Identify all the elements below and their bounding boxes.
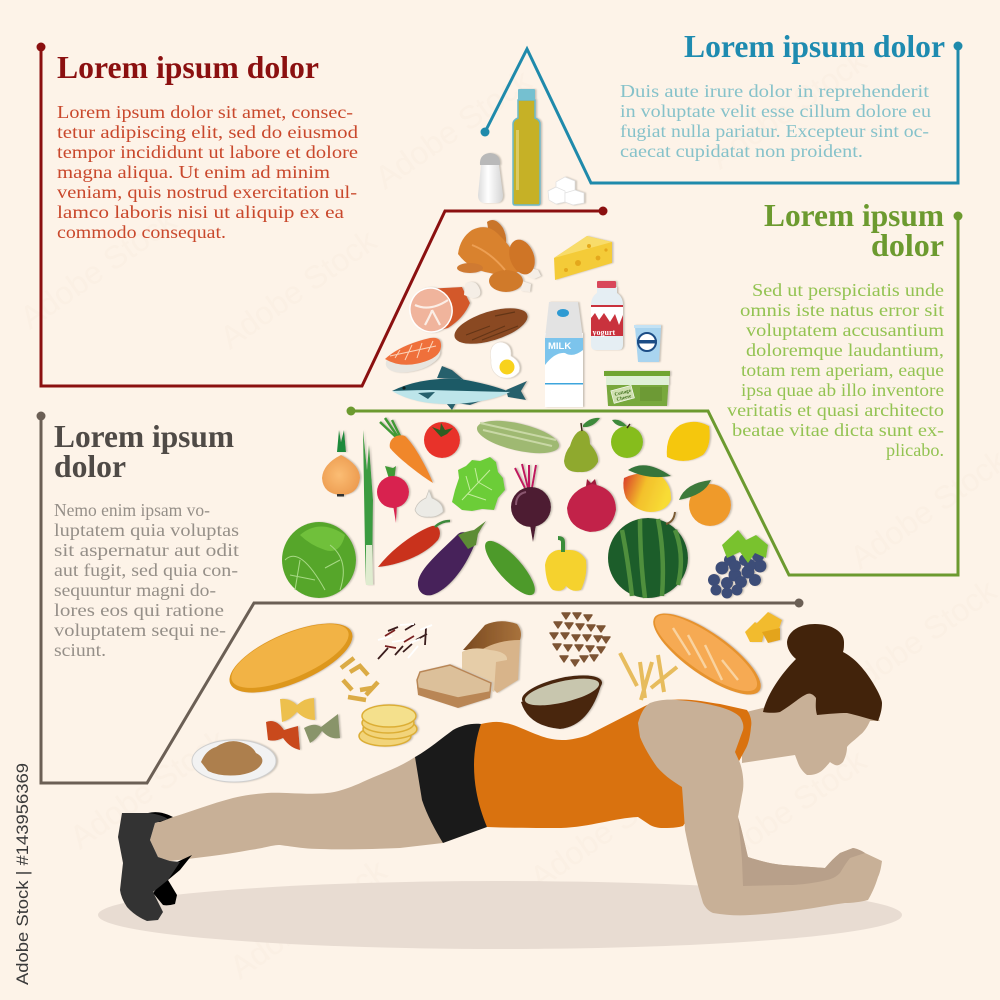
- figure: woman in plank pose: [118, 624, 882, 921]
- body text: green: doloremque laudantium,: [746, 340, 944, 360]
- body text: gray: [54, 500, 239, 660]
- stock credit: Adobe Stock | #143956369: [14, 763, 32, 985]
- icon: onion: [322, 430, 360, 496]
- text: Adobe Stock: [523, 762, 693, 896]
- icon: green onion: [363, 430, 373, 585]
- body text: blue: caecat cupidatat non proident.: [620, 141, 863, 161]
- heading: gray: [54, 418, 234, 484]
- icon: green apple: [611, 420, 643, 458]
- icon: bread slices: [417, 665, 491, 708]
- body text: green: beatae vitae dicta sunt ex-: [732, 420, 944, 440]
- frame: fruit and vegetable tier green line: [346, 212, 962, 575]
- icon: buckwheat: [550, 613, 610, 666]
- icon: cabbage: [282, 522, 356, 598]
- icon: garlic: [415, 490, 443, 517]
- icon: beet: [511, 464, 551, 542]
- neck and face: [742, 685, 880, 775]
- icon: eggplant: [418, 521, 486, 595]
- icon: yogurt bottle: [591, 281, 623, 350]
- icon: fried egg: [490, 342, 520, 378]
- body text: red: magna aliqua. Ut enim ad minim: [57, 162, 330, 182]
- icon: zucchini: [474, 414, 562, 460]
- body text: green: totam rem aperiam, eaque: [741, 360, 944, 380]
- body text: blue: Duis aute irure dolor in reprehenderit: [620, 81, 929, 101]
- icon: tomato: [424, 422, 460, 458]
- ground shadow: [98, 881, 902, 949]
- icon: fish: [392, 366, 527, 410]
- body text: green: omnis iste natus error sit: [740, 300, 944, 320]
- icon: salt shaker: [478, 153, 503, 203]
- frame: protein tier red line: [36, 42, 608, 386]
- text panel: red: [57, 49, 358, 242]
- icon: cucumber: [478, 534, 542, 602]
- text: Adobe Stock: [368, 62, 538, 196]
- body text: green: Sed ut perspiciatis unde: [752, 280, 944, 300]
- icon: cottage cheese tub: Cottage: [614, 389, 632, 398]
- body text: red: Lorem ipsum dolor sit amet, consec-: [57, 102, 353, 122]
- icon: salmon steak: [383, 338, 443, 378]
- leg: [150, 757, 450, 861]
- icon: milk carton: MILK: [548, 341, 571, 352]
- body text: gray: sequuntur magni do-: [54, 580, 216, 600]
- shoe: [118, 812, 192, 921]
- icon: pear: [564, 418, 600, 472]
- body text: red: veniam, quis nostrud exercitation ul-: [57, 182, 357, 202]
- icon: cottage cheese tub: [604, 371, 670, 406]
- body text: gray: lores eos qui ratione: [54, 600, 224, 620]
- icon: orange: [679, 480, 731, 526]
- body text: red: lamco laboris nisi ut aliquip ex ea: [57, 202, 344, 222]
- icon: pomegranate: [567, 479, 616, 532]
- icon: plate with food: [192, 740, 276, 782]
- shorts: [415, 724, 487, 843]
- text: Adobe Stock: [213, 222, 383, 356]
- icon: mango: [623, 465, 671, 512]
- body text: green: voluptatem accusantium: [746, 320, 944, 340]
- body text: gray: aut fugit, sed quia con-: [54, 560, 238, 580]
- heading: red: Lorem ipsum dolor: [57, 49, 319, 85]
- body text: blue: fugiat nulla pariatur. Excepteur sint oc-: [620, 121, 929, 141]
- hair: [763, 624, 882, 721]
- body text: green: [727, 280, 944, 460]
- heading: gray: dolor: [54, 448, 126, 484]
- icon: baguette right: [643, 600, 771, 708]
- body text: red: [57, 102, 358, 242]
- icon: grapes: [708, 530, 768, 598]
- icon: yellow bell pepper: [545, 538, 586, 591]
- body text: red: tetur adipiscing elit, sed do eiusmod: [57, 122, 358, 142]
- text: Adobe Stock: [833, 572, 1000, 706]
- body text: gray: luptatem quia voluptas: [54, 520, 239, 540]
- text panel: green: [727, 197, 944, 460]
- icon: polenta discs: [359, 705, 417, 746]
- shirt: [474, 699, 751, 828]
- text: Adobe Stock: [703, 42, 873, 176]
- icon: baguette left: [220, 609, 362, 707]
- body text: blue: [620, 81, 931, 161]
- body text: blue: in voluptate velit esse cillum dolore eu: [620, 101, 931, 121]
- icon: cheese wedge: [554, 236, 612, 280]
- icon: roast chicken: [457, 220, 541, 292]
- heading: green: dolor: [871, 227, 944, 263]
- icon: wild rice: [378, 624, 432, 659]
- frame: grain tier gray line: [36, 412, 804, 783]
- icon: milk carton: [545, 302, 583, 407]
- icon: penne pasta: [620, 653, 677, 700]
- text panel: blue: [620, 28, 945, 161]
- icon: chili pepper: [378, 521, 450, 567]
- body text: green: veritatis et quasi architecto: [727, 400, 944, 420]
- icon: radish: [377, 466, 409, 523]
- icon: watermelon: [608, 512, 688, 598]
- icon: bread loaf: [462, 621, 521, 693]
- frame: fats tier blue line: [480, 42, 962, 183]
- icon: ham: [404, 282, 480, 337]
- body text: red: tempor incididunt ut labore et dolore: [57, 142, 358, 162]
- forearm shading: [738, 817, 865, 886]
- body text: red: commodo consequat.: [57, 222, 226, 242]
- heading: gray: Lorem ipsum: [54, 418, 234, 454]
- body text: gray: sit aspernatur aut odit: [54, 540, 239, 560]
- icon: elbow macaroni: [341, 658, 378, 700]
- heading: green: Lorem ipsum: [764, 197, 944, 233]
- body text: green: ipsa quae ab illo inventore: [741, 380, 944, 400]
- icon: lettuce: [452, 457, 505, 511]
- text: Adobe Stock: [223, 852, 393, 986]
- body text: gray: Nemo enim ipsam vo-: [54, 500, 210, 520]
- icon: olive oil bottle: [513, 89, 540, 205]
- heading: green: [764, 197, 944, 263]
- icon: lemon: [667, 422, 710, 461]
- arm: [638, 700, 882, 915]
- icon: steak: [450, 301, 532, 351]
- icon: carrot: [380, 418, 433, 483]
- icon: cottage cheese tub: Cheese: [616, 394, 633, 403]
- text: Adobe Stock: [703, 742, 873, 876]
- body text: gray: sciunt.: [54, 640, 106, 660]
- body text: gray: voluptatem sequi ne-: [54, 620, 226, 640]
- text: Adobe Stock: [63, 722, 233, 856]
- icon: yogurt bottle: yogurt: [592, 328, 616, 337]
- icon: farfalle pasta: [266, 698, 340, 750]
- icon: cheese cubes: [745, 612, 782, 643]
- heading: blue: Lorem ipsum dolor: [684, 28, 945, 64]
- icon: sugar cubes: [548, 177, 584, 205]
- text panel: gray: [54, 418, 239, 660]
- icon: yogurt cup: [634, 325, 661, 362]
- body text: green: plicabo.: [886, 440, 944, 460]
- text: Adobe Stock: [13, 202, 183, 336]
- icon: bowl of porridge: [519, 669, 605, 729]
